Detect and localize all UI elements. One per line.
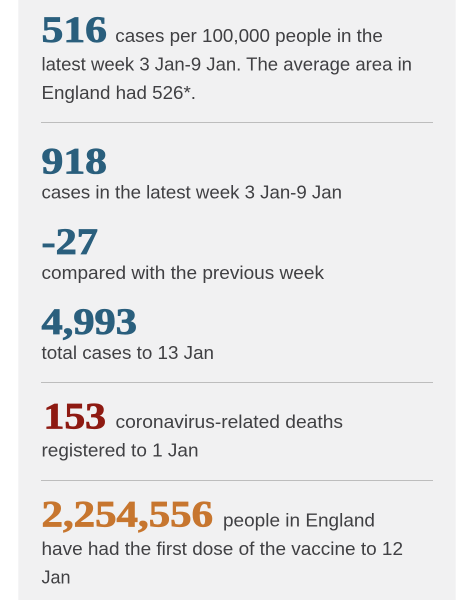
stat: -27: -27 — [42, 222, 98, 263]
stat: 153: 153 — [44, 396, 106, 438]
text: weekly change: compared with the previous week — [42, 262, 325, 283]
stat: 516: 516 — [42, 10, 107, 51]
text: weekly cases: cases in the latest week 3 Jan-9 Jan — [42, 182, 342, 202]
text: vaccine line 2: have had the first dose of the vaccine to 12 — [42, 538, 403, 559]
stat: 918: 918 — [42, 142, 107, 182]
section: deaths — [42, 396, 343, 460]
text: vaccine line 1: people in England — [223, 510, 375, 530]
stat: 4,993: 4,993 — [42, 302, 137, 343]
text: deaths line 2: registered to 1 Jan — [42, 440, 198, 460]
section: case counts — [42, 142, 342, 363]
text: rate line 1: cases per 100,000 people in the — [115, 25, 383, 46]
section: vaccinations — [42, 494, 403, 588]
text: rate line 3: England had 526*. — [42, 82, 196, 103]
text: deaths line 1: coronavirus-related deaths — [116, 411, 343, 432]
text: vaccine line 3: Jan — [42, 566, 70, 588]
text: total cases: total cases to 13 Jan — [42, 342, 214, 363]
stat: 2,254,556: 2,254,556 — [42, 494, 213, 536]
text: rate line 2: latest week 3 Jan-9 Jan. The average area in — [42, 54, 412, 74]
section: infection rate — [42, 10, 412, 103]
